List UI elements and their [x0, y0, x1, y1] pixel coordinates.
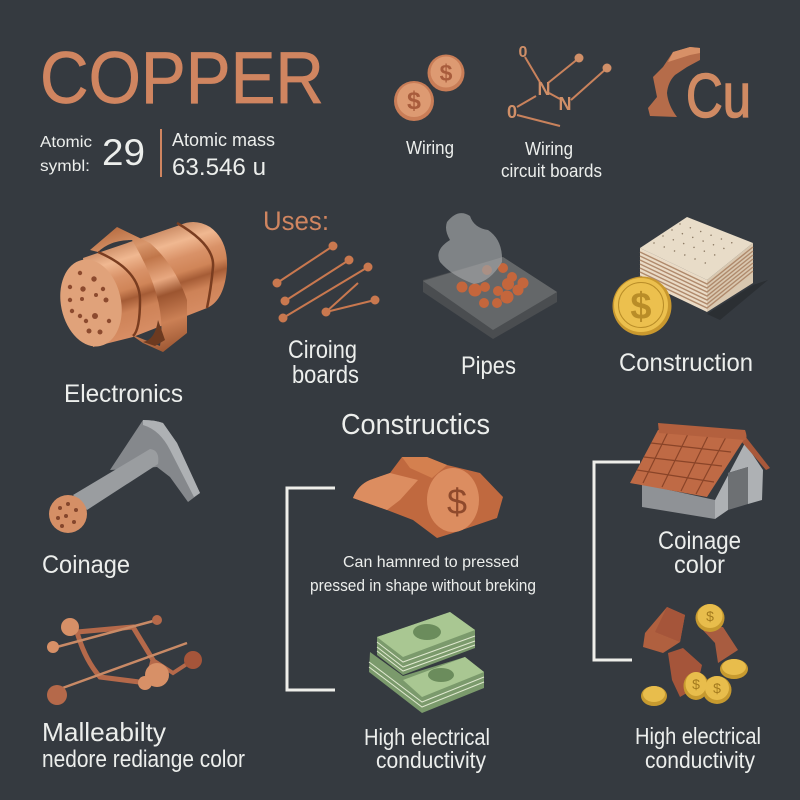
text: can be hammered: pressed in shape without breking	[310, 576, 536, 595]
icon: circuit molecule: N	[558, 94, 572, 114]
label: malleability: Malleabilty	[42, 717, 166, 747]
icon: copper chunks and coins: $	[706, 608, 714, 624]
atomic info: Atomic	[40, 134, 92, 151]
heading: uses: Uses:	[263, 206, 329, 236]
label: wiring circuit boards: circuit boards	[501, 161, 602, 181]
label: coinage color: color	[674, 551, 725, 579]
label: ciroing boards	[288, 336, 359, 389]
icon: circuit molecule: 0	[519, 44, 528, 61]
icon: hammer	[49, 420, 200, 533]
icon: bent wires	[47, 615, 202, 705]
icon: smoking ore plate	[423, 213, 557, 339]
icon: Cu symbol	[648, 47, 751, 131]
label: wiring: Wiring	[406, 138, 454, 158]
label: ciroing boards: boards	[292, 361, 359, 389]
label: pipes: Pipes	[461, 352, 516, 380]
icon: copper ore with dollar	[353, 457, 503, 538]
label: coinage: Coinage	[42, 551, 130, 579]
label: high electrical conductivity right: conductivity	[645, 747, 755, 773]
icon: circuit wires	[274, 242, 378, 322]
atomic info: Atomic mass	[172, 130, 275, 150]
atomic info: 29	[102, 132, 145, 173]
heading: constructics: Constructics	[341, 409, 490, 441]
label: wiring circuit boards: Wiring	[525, 139, 573, 159]
icon: copper chunks and coins	[641, 604, 748, 706]
label: coinage color: Coinage	[658, 527, 741, 555]
icon: coins: $	[407, 87, 421, 115]
icon: copper chunks and coins: $	[692, 676, 700, 692]
label: coinage color	[658, 527, 741, 579]
bracket left	[287, 488, 335, 690]
icon: coins	[394, 54, 464, 121]
icon: copper chunks and coins: $	[713, 680, 721, 696]
icon: copper cylinder	[53, 222, 227, 352]
icon: circuit molecule: N	[538, 79, 550, 99]
label: high electrical conductivity center: High electrical	[364, 724, 490, 750]
icon: money stack	[369, 612, 484, 713]
icon: stack and coin	[612, 217, 768, 336]
icon: circuit molecule: 0	[507, 102, 517, 122]
label: malleability	[42, 717, 245, 773]
label: high electrical conductivity right	[635, 723, 761, 773]
atomic info: 63.546 u	[172, 154, 266, 181]
atomic info: symbl:	[40, 158, 90, 175]
bracket right	[594, 462, 640, 660]
icon: circuit molecule	[507, 44, 612, 126]
atomic info	[40, 129, 275, 181]
icon: coins: $	[440, 60, 453, 86]
label: high electrical conductivity right: High electrical	[635, 723, 761, 749]
icon: stack and coin: $	[630, 286, 652, 328]
text: can be hammered: Can hamnred to pressed	[343, 554, 519, 571]
label: ciroing boards: Ciroing	[288, 336, 357, 364]
icon: house	[630, 423, 770, 519]
label: wiring circuit boards	[501, 139, 602, 181]
label: high electrical conductivity center: conductivity	[376, 747, 486, 773]
label: electronics: Electronics	[64, 380, 183, 408]
label: malleability: nedore rediange color	[42, 746, 245, 773]
label: construction: Construction	[619, 349, 753, 377]
label: high electrical conductivity center	[364, 724, 490, 773]
text: can be hammered	[310, 554, 536, 595]
icon: copper ore with dollar: $	[447, 481, 467, 522]
icon: Cu symbol: Cu	[686, 62, 751, 131]
title: COPPER	[40, 38, 324, 119]
